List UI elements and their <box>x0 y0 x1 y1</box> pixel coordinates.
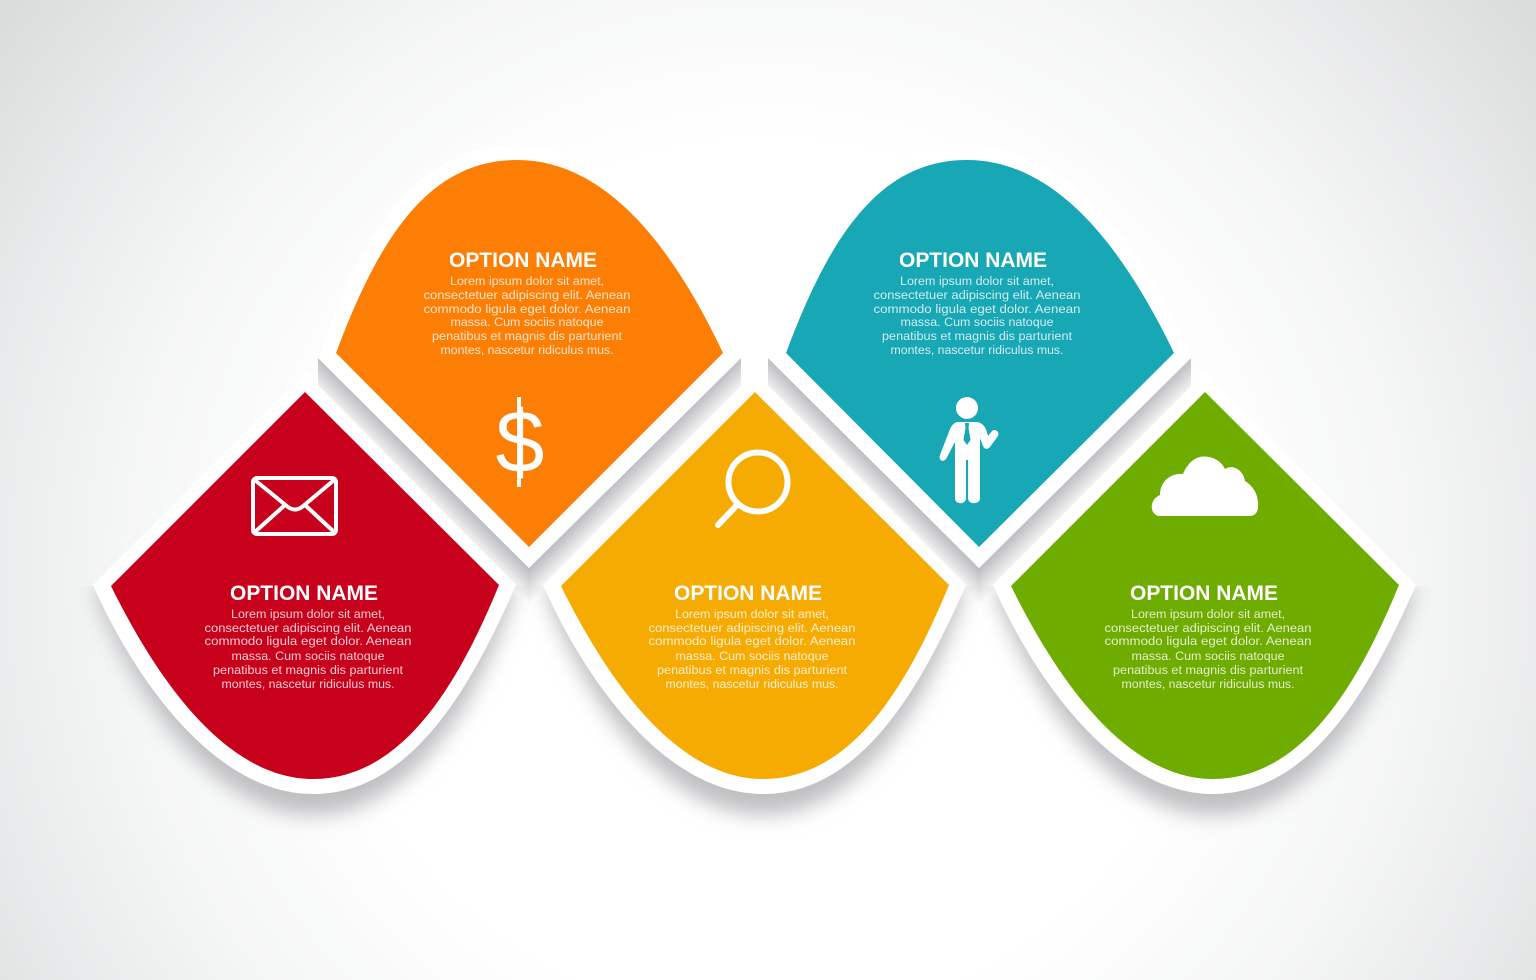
white border: teal panel <box>768 145 1191 568</box>
text block: yellow option: commodo ligula eget dolor. Aenean <box>648 634 856 648</box>
text block: green option: massa. Cum sociis natoque <box>1132 649 1285 663</box>
white border: orange panel <box>318 145 741 568</box>
text block: teal option: commodo ligula eget dolor. Aenean <box>874 302 1081 316</box>
panel: green option <box>993 372 1416 815</box>
text block: red option: Lorem ipsum dolor sit amet, <box>231 607 385 621</box>
text block: teal option: massa. Cum sociis natoque <box>900 315 1054 329</box>
shape: red panel <box>111 392 499 779</box>
icon: businessman <box>940 397 998 503</box>
text block: orange option: massa. Cum sociis natoque <box>450 315 604 329</box>
text block: green option: consectetuer adipiscing elit. Aenean <box>1104 621 1312 635</box>
shadow: yellow panel <box>543 586 966 815</box>
text block: teal option: penatibus et magnis dis parturient <box>882 329 1073 343</box>
text block: orange option: Lorem ipsum dolor sit amet, <box>450 274 604 288</box>
text block: red option: montes, nascetur ridiculus mus. <box>222 677 394 691</box>
white border: yellow panel <box>543 372 966 794</box>
shape: orange panel <box>336 160 723 547</box>
text block: green option <box>1104 607 1312 691</box>
text block: teal option: montes, nascetur ridiculus mus. <box>890 343 1064 357</box>
heading: yellow option: OPTION NAME <box>674 582 822 605</box>
text block: yellow option <box>648 607 856 691</box>
icon: cloud <box>1152 456 1258 516</box>
text block: green option: commodo ligula eget dolor. Aenean <box>1104 634 1312 648</box>
text block: green option: Lorem ipsum dolor sit amet, <box>1131 607 1285 621</box>
text block: yellow option: montes, nascetur ridiculus mus. <box>666 677 838 691</box>
text block: orange option: consectetuer adipiscing elit. Aenean <box>424 288 631 302</box>
text block: yellow option: massa. Cum sociis natoque <box>676 649 829 663</box>
icon: magnifying glass <box>718 452 788 525</box>
shadow: red panel <box>93 586 516 815</box>
shape: yellow panel <box>561 392 949 779</box>
text block: green option: penatibus et magnis dis parturient <box>1113 663 1304 677</box>
panel: yellow option <box>543 372 966 815</box>
text block: teal option <box>874 274 1081 357</box>
heading: teal option: OPTION NAME <box>899 249 1047 272</box>
text block: red option: massa. Cum sociis natoque <box>232 649 385 663</box>
heading: red option: OPTION NAME <box>230 582 378 605</box>
text block: red option: consectetuer adipiscing elit. Aenean <box>204 621 412 635</box>
text block: yellow option: Lorem ipsum dolor sit amet, <box>675 607 829 621</box>
white border: green panel <box>993 372 1416 794</box>
text block: yellow option: penatibus et magnis dis parturient <box>657 663 848 677</box>
text block: red option: penatibus et magnis dis parturient <box>213 663 404 677</box>
text block: teal option: Lorem ipsum dolor sit amet, <box>900 274 1054 288</box>
text block: orange option: commodo ligula eget dolor. Aenean <box>424 302 631 316</box>
shape: green panel <box>1011 392 1399 779</box>
shadow: green panel <box>993 586 1416 815</box>
white border: red panel <box>93 372 516 794</box>
icon: envelope <box>253 478 336 534</box>
shadow: orange panel <box>318 358 741 604</box>
text block: orange option <box>424 274 631 357</box>
panel: teal option <box>768 145 1191 604</box>
panel: red option <box>93 372 516 815</box>
panel: orange option <box>318 145 741 604</box>
text block: green option: montes, nascetur ridiculus mus. <box>1122 677 1294 691</box>
shape: teal panel <box>786 160 1174 547</box>
text block: orange option: penatibus et magnis dis parturient <box>432 329 623 343</box>
heading: green option: OPTION NAME <box>1130 582 1278 605</box>
text block: orange option: montes, nascetur ridiculus mus. <box>440 343 614 357</box>
text block: red option: commodo ligula eget dolor. Aenean <box>204 634 412 648</box>
text block: teal option: consectetuer adipiscing elit. Aenean <box>874 288 1081 302</box>
heading: orange option: OPTION NAME <box>449 249 597 272</box>
text block: red option <box>204 607 412 691</box>
text block: yellow option: consectetuer adipiscing elit. Aenean <box>648 621 856 635</box>
shadow: teal panel <box>768 358 1191 604</box>
icon: dollar sign: $ <box>496 392 544 491</box>
